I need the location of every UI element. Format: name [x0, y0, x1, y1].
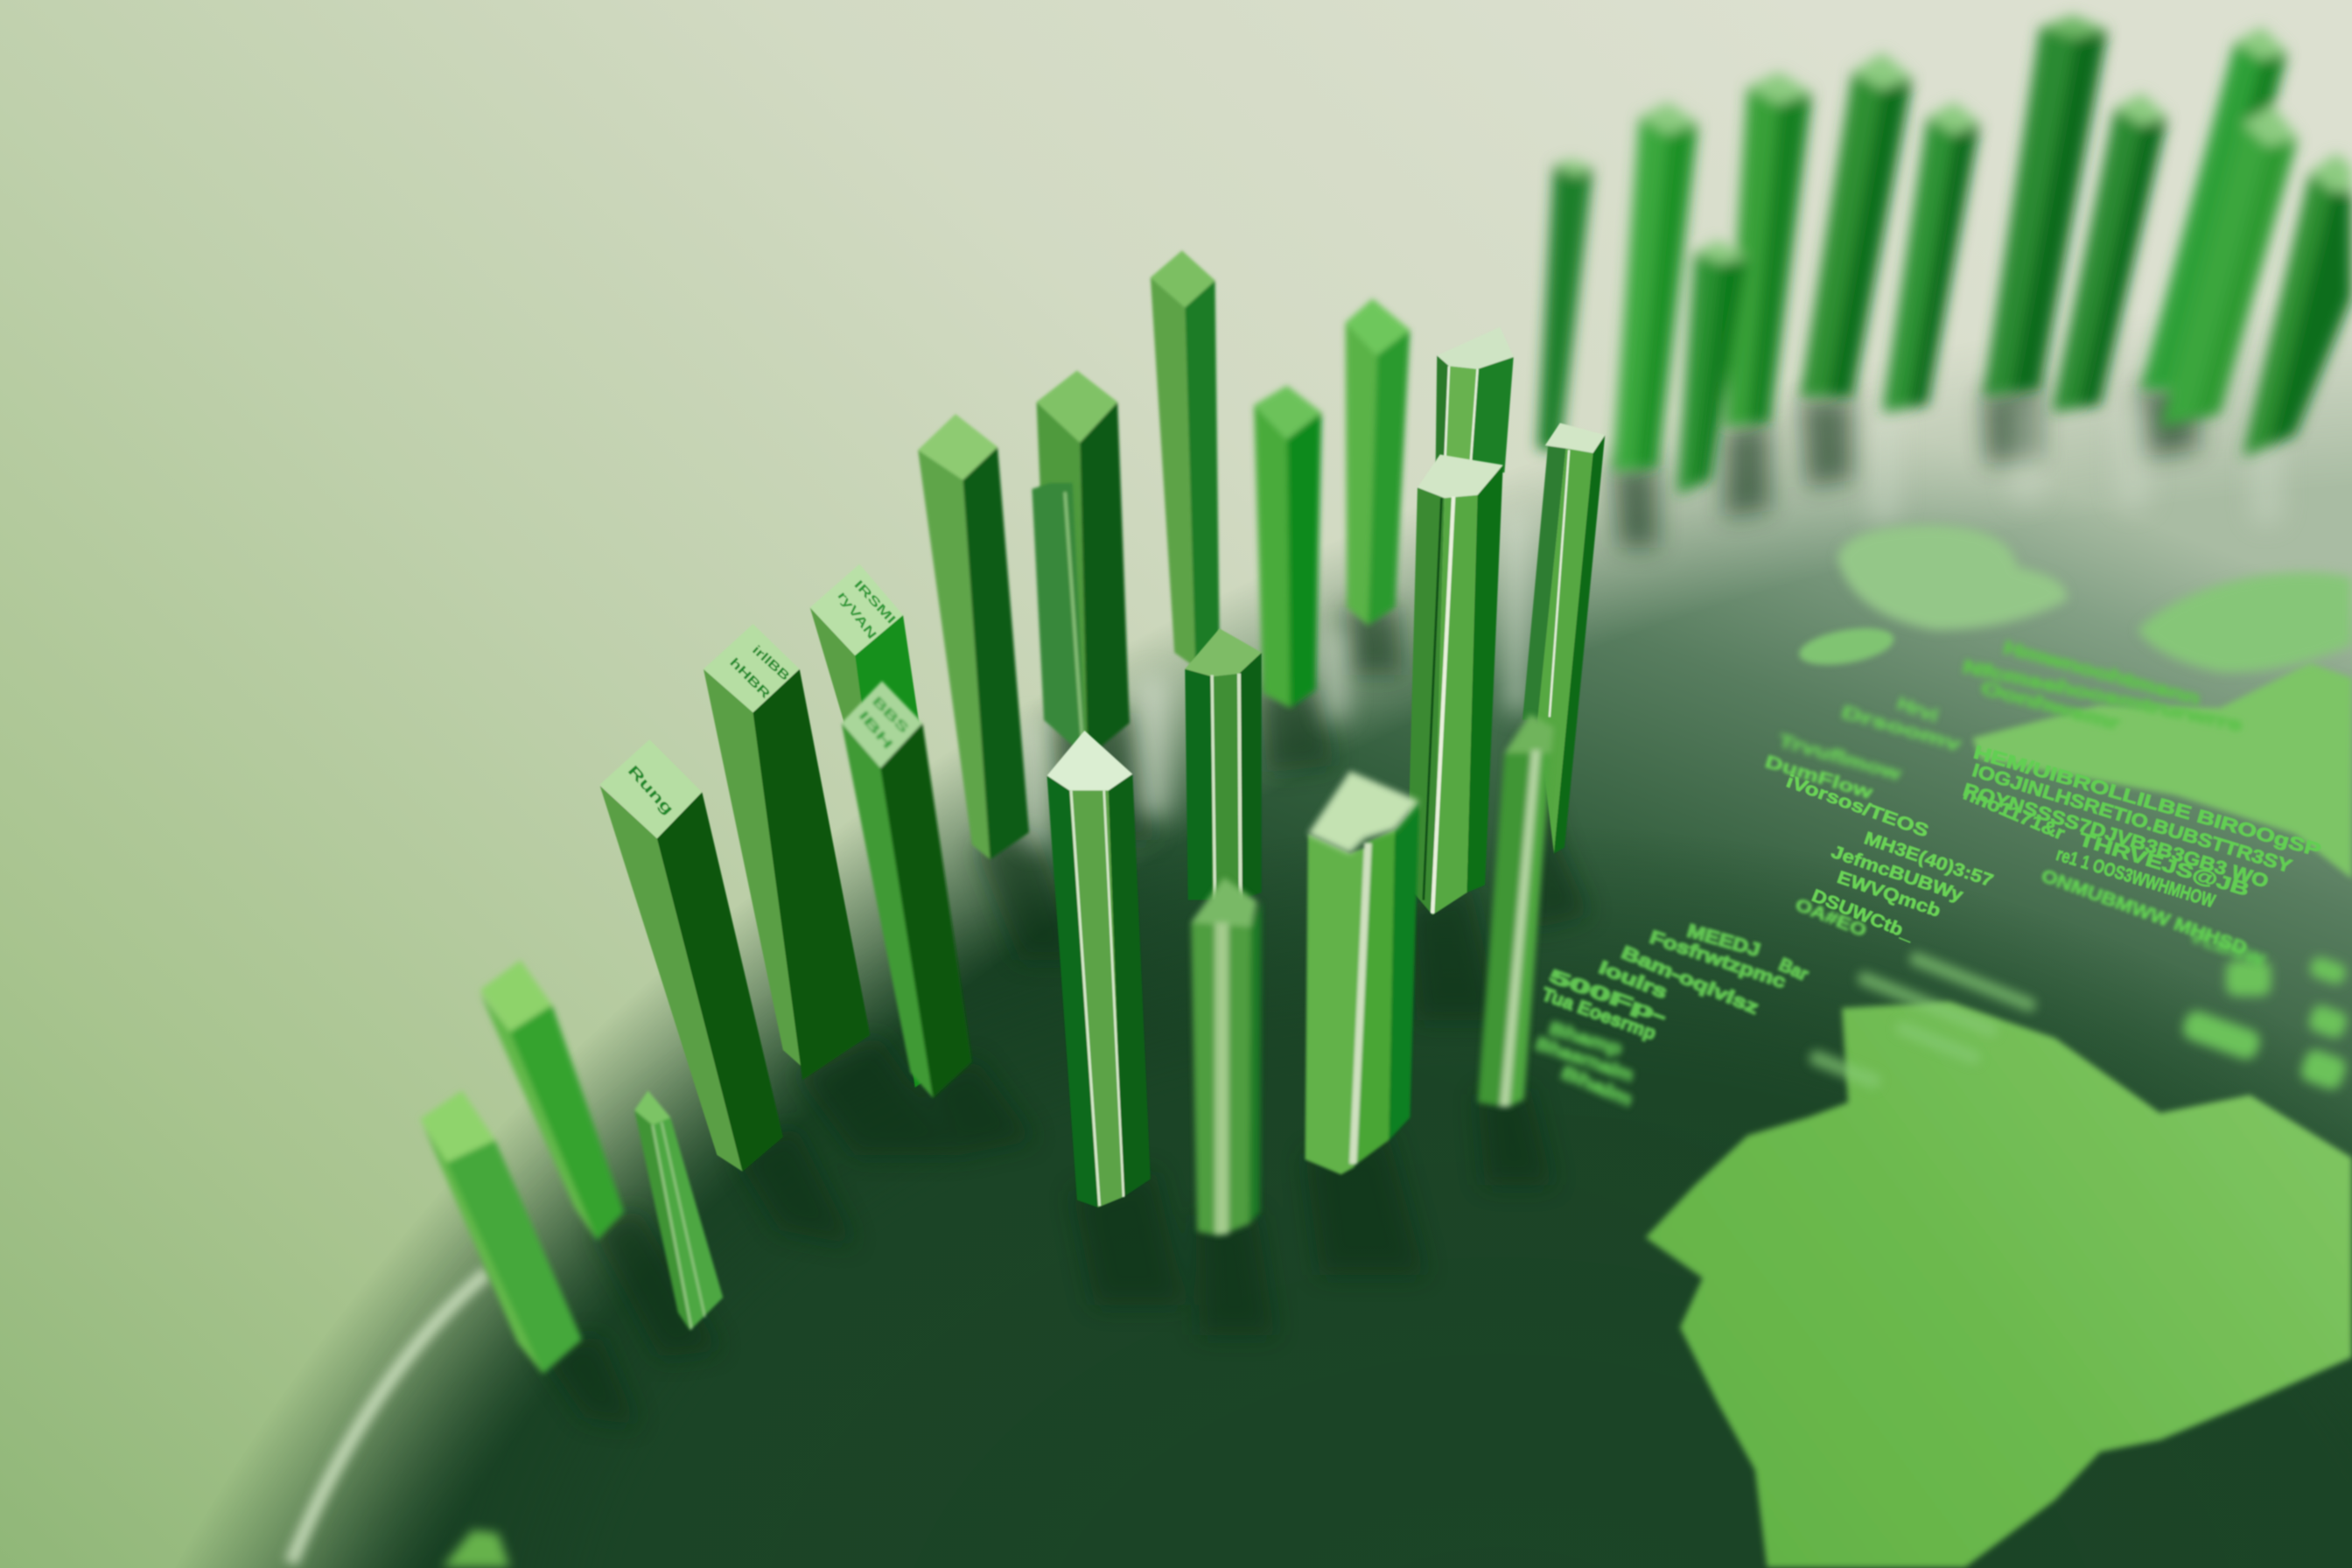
bar: blurred 19	[1191, 878, 1262, 1236]
map labels: east group: ROYNSSSS7DJVB3B3GB3 WO	[1961, 779, 2271, 892]
back bar 11	[2243, 153, 2352, 458]
back bar 1	[1537, 159, 1593, 450]
bar top label rows: ryVAN	[834, 589, 878, 642]
map labels: west group: JefmcBUBWy	[1829, 842, 1966, 906]
map labels: west group: MH3E(40)3:57	[1862, 828, 1996, 891]
map labels: south-west group: MEEDJ	[1684, 920, 1762, 961]
map labels: upper blurred: Nfcmsehoosmtrurwrre	[1961, 656, 2244, 736]
bar: far left 2	[480, 960, 624, 1241]
bar: white-top 13	[1436, 327, 1514, 472]
bar: hex 20	[1305, 771, 1419, 1174]
bar top label rows: IBH	[856, 708, 896, 752]
back bar 6	[1882, 102, 1980, 412]
bar: middle 11	[1254, 386, 1321, 708]
back bar 2	[1613, 102, 1698, 472]
map labels: west group: DumFlow	[1763, 752, 1876, 803]
map labels: south-west group: Ioulrs	[1596, 956, 1670, 1003]
bar: tall 14	[1407, 454, 1503, 915]
bar: middle 10	[1151, 250, 1220, 668]
bar: middle 8	[918, 414, 1029, 859]
bar: blurred 16	[1478, 714, 1554, 1107]
back bar 9	[2140, 27, 2287, 390]
map labels: west group	[1763, 693, 1996, 945]
map labels: east group: VLBSW	[2187, 925, 2268, 971]
map labels: upper blurred: Hmwnoohtmsnn	[2001, 637, 2202, 709]
back bar 10	[2160, 105, 2298, 428]
bar: hex 17	[1185, 628, 1262, 900]
map labels: west group: DSUWCtb_	[1809, 886, 1917, 945]
bar top label rows	[856, 694, 912, 752]
bar top label rows: IRSMI	[851, 578, 898, 626]
map labels: south-west group	[1533, 920, 1811, 1110]
land: large southern continent	[1646, 1002, 2352, 1567]
light reflections on the floor	[1023, 397, 2283, 848]
world map	[1533, 525, 2352, 1567]
blurred back row of bars, top right	[1537, 15, 2352, 495]
map labels: east group: HEM/UIBROLLILBE BIROOgSP	[1971, 741, 2323, 861]
blurred land label rows	[1808, 950, 2038, 1090]
back bar 7	[1983, 15, 2108, 397]
map labels: east group: re1 1 OOS3WWHMHOW	[2054, 844, 2218, 912]
map labels: south-west group: Bhasrnalm	[1533, 1032, 1636, 1086]
map labels: west group: Drsoomv	[1839, 702, 1964, 755]
map labels: south-west group: Bar	[1775, 954, 1811, 985]
bar: labeled 4	[600, 739, 783, 1172]
bar top label rows: irllBB	[749, 643, 792, 683]
bar: hex 18	[1047, 731, 1151, 1208]
blurred island top	[1838, 525, 2067, 630]
bar: far left small 3	[634, 1090, 723, 1331]
map labels: east group: nno1171&r	[1960, 783, 2068, 844]
back bar 5	[1800, 52, 1913, 397]
floor shadows and reflections	[540, 387, 2283, 1425]
map labels: west group: EWVQmcb	[1835, 867, 1943, 921]
map labels: west group: Trvuflmow	[1776, 731, 1904, 785]
map labels: south-west group: Fosfrwtzpmc	[1647, 927, 1788, 992]
land: northern continent	[1972, 663, 2352, 879]
bar top label rows	[834, 578, 898, 642]
disc dark lower area	[424, 919, 2254, 1435]
back bar 4	[1677, 240, 1747, 495]
back bar 8	[2052, 93, 2167, 412]
map labels: west group: iVorsos/TEOS	[1783, 771, 1931, 842]
bar: middle 12	[1346, 298, 1410, 626]
bar: labeled 5	[704, 624, 870, 1080]
map labels: east group: IOGJINLHSRETIO.BUBSTTR3SY	[1970, 760, 2294, 877]
map labels: east group: ONMUBMWW MHHSD	[2039, 864, 2250, 959]
map labels: east group: THRVEJS@JB	[2076, 829, 2251, 900]
blurred small island	[1796, 622, 1897, 671]
blurred blocks right	[2180, 955, 2349, 1092]
map labels: south-west group: Bam-oqlvlsz	[1618, 942, 1761, 1018]
disc rim highlight	[291, 1272, 487, 1563]
map labels: upper blurred	[1961, 637, 2244, 736]
map labels: upper blurred: Oonhwsmr	[1979, 678, 2122, 734]
map labels: south-west group: 500Fp-	[1546, 965, 1670, 1027]
map labels: east group	[1960, 741, 2323, 971]
bar: far left 1	[420, 1090, 582, 1374]
bar top label rows: hHBR	[726, 655, 773, 702]
map labels: south-west group: Bhamp	[1547, 1018, 1625, 1060]
dark globe disc	[189, 323, 2352, 1568]
blurred island right	[2138, 572, 2352, 672]
bar top label rows	[726, 643, 792, 702]
map labels: south-west group: Bhalm	[1558, 1061, 1635, 1110]
map labels: south-west group: Tua Eoesrmp	[1539, 984, 1659, 1044]
bar: tall 15	[1522, 423, 1605, 853]
back bar 3	[1725, 72, 1812, 428]
map labels: west group: OA#EO	[1792, 894, 1870, 942]
bar shadows	[540, 387, 2197, 1425]
bar: middle 9 front	[1032, 483, 1086, 758]
bar: middle 9	[1037, 370, 1130, 758]
map labels: west group: Hrvi	[1894, 693, 1941, 726]
bar: labeled 7	[842, 681, 972, 1098]
bar: labeled 6	[810, 564, 968, 1088]
bar top label: Rung	[625, 761, 677, 818]
bar top label rows: BBS	[869, 694, 912, 736]
small blurred land at bottom left	[443, 1530, 510, 1567]
